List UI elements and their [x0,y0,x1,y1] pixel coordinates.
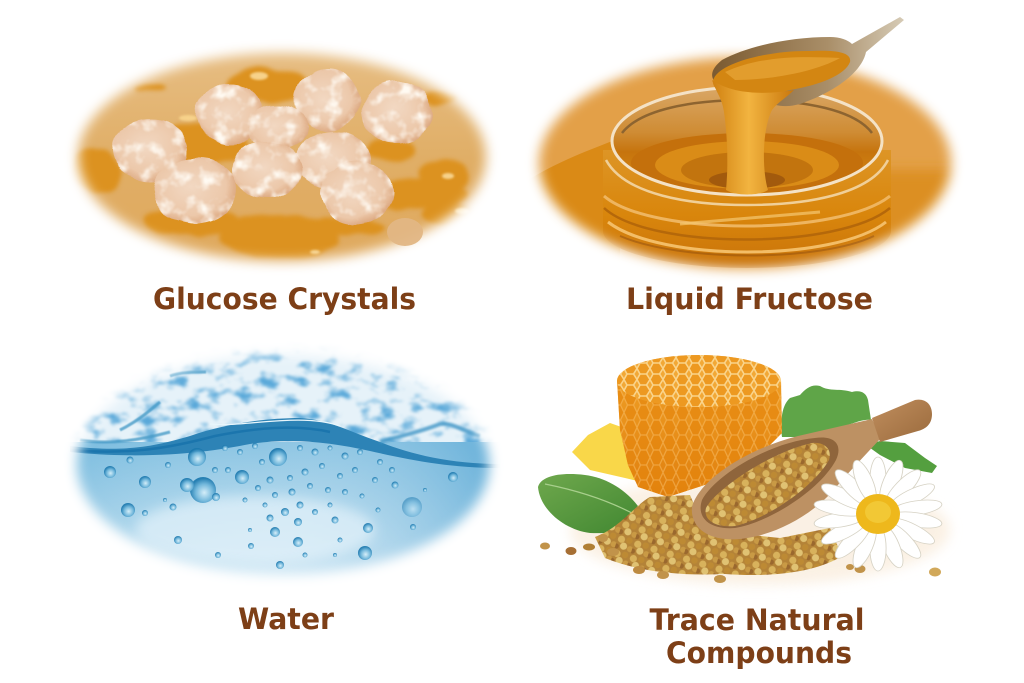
crystals [111,69,433,224]
jar body [603,150,891,268]
small crystal [387,218,423,246]
label: Trace Natural Compounds: Compounds [666,636,852,670]
spoon [712,17,904,106]
bubbles [104,443,458,569]
wave ridge [70,418,500,468]
panel: liquid fructose [510,17,980,316]
panel: glucose crystals [69,44,495,315]
scoop pollen [706,443,830,526]
panel: trace natural compounds [538,355,950,670]
leaf right small [866,441,937,473]
image: glucose crystals on honey [69,44,495,270]
daisy [813,457,943,571]
label: Glucose Crystals: Glucose Crystals [153,282,416,316]
wax piece [572,423,642,482]
label: Trace Natural Compounds [650,603,864,670]
leaf back right [781,385,871,437]
pollen heap [595,495,842,575]
wooden scoop [692,400,932,539]
label: Water: Water [238,602,335,636]
label: Trace Natural Compounds: Trace Natural [650,603,864,637]
image: honeycomb, pollen, daisy [538,355,950,585]
panel: water [68,349,498,630]
image: water splash [68,349,498,580]
label: Liquid Fructose: Liquid Fructose [626,282,873,316]
jar opening [606,87,888,205]
leaf left [538,474,647,533]
honey stream [712,80,794,194]
image: honey jar with spoon [530,17,960,278]
loose pollen [540,534,941,583]
honeycomb [617,355,782,497]
